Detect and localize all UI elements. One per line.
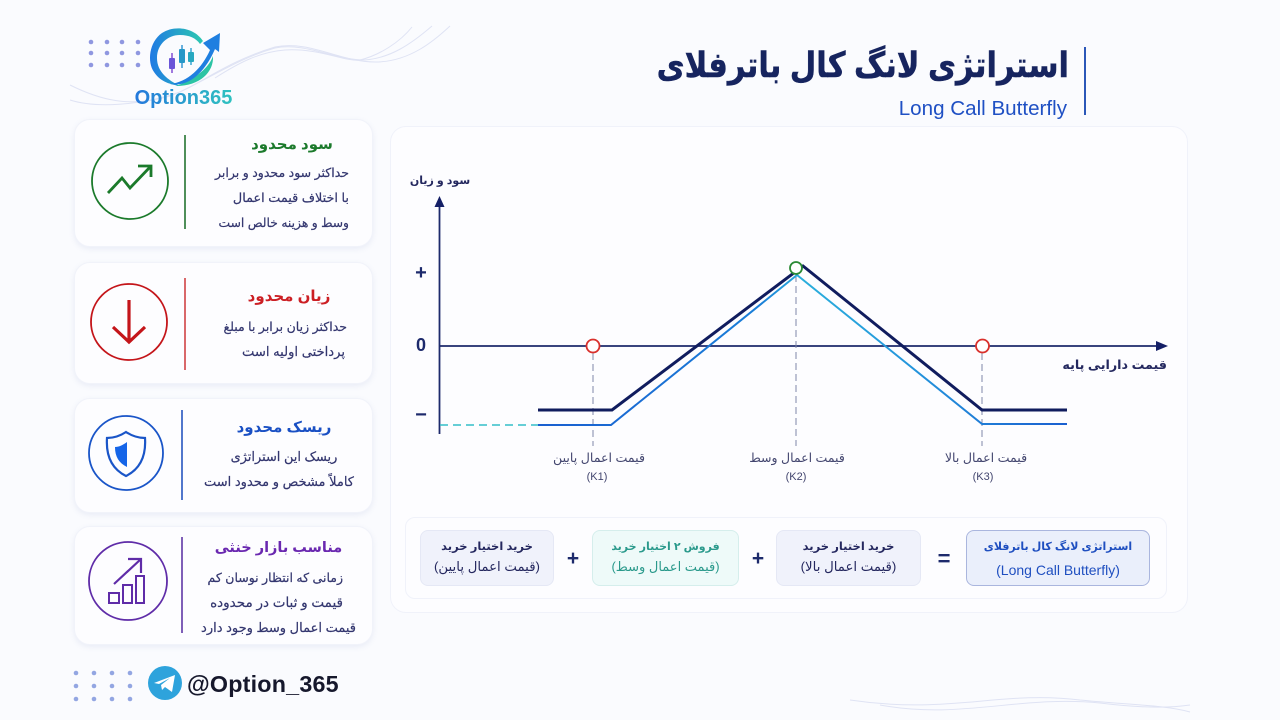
icon: telegram — [148, 666, 182, 700]
heading: limited profit: سود محدود — [251, 136, 333, 153]
icon: bar chart with arrow — [88, 541, 168, 621]
axis tick plus: + — [415, 262, 427, 284]
equals sign: = — [938, 546, 950, 571]
text: neutral market line 3: قیمت اعمال وسط وجود دارد — [201, 620, 356, 635]
panel: payoff chart — [390, 126, 1188, 613]
panel: formula — [405, 517, 1167, 599]
strike K3 symbol: (K3) — [973, 471, 993, 483]
text: limited loss line 2: پرداختی اولیه است — [242, 344, 345, 359]
point K3 — [976, 340, 989, 352]
text: limited risk: ریسک این استراتژی — [231, 449, 337, 464]
title: استراتژی لانگ کال باترفلای — [657, 46, 1069, 85]
plus sign: + — [567, 547, 579, 570]
text: neutral market: زمانی که انتظار نوسان کم — [208, 571, 343, 585]
text: limited profit line 2: با اختلاف قیمت اعمال — [233, 190, 349, 205]
formula box: buy low strike — [420, 530, 554, 586]
payoff line dark — [538, 266, 1067, 410]
strike K1 symbol: (K1) — [587, 471, 607, 483]
text: limited profit: حداکثر سود محدود و برابر — [215, 166, 349, 180]
logo: Option365: Option365 — [135, 87, 232, 109]
payoff line light — [538, 275, 1067, 425]
formula text: buy low strike: خرید اختیار خرید — [441, 541, 533, 553]
strike label K2: قیمت اعمال وسط — [749, 451, 845, 465]
icon: rising trend — [91, 142, 169, 220]
panel: limited loss — [74, 262, 373, 384]
telegram handle: @Option_365 — [187, 671, 339, 697]
subtitle: Long Call Butterfly — [899, 97, 1067, 120]
strike K2 symbol: (K2) — [786, 471, 806, 483]
panel: limited profit — [74, 119, 373, 247]
axis tick minus: − — [415, 404, 427, 426]
heading: limited risk: ریسک محدود — [237, 419, 331, 436]
formula text: english: (Long Call Butterfly) — [996, 562, 1120, 578]
formula text: middle strike: (قیمت اعمال وسط) — [611, 559, 720, 574]
divider — [184, 278, 186, 370]
teal dashed max-loss guide — [440, 424, 538, 426]
panel: neutral market — [74, 526, 373, 645]
decorative dot grid bottom — [74, 670, 132, 702]
text: limited loss: حداکثر زیان برابر با مبلغ — [223, 320, 347, 334]
formula text: buy high: خرید اختیار خرید — [803, 541, 894, 553]
text: limited profit line 3: وسط و هزینه خالص است — [219, 216, 349, 230]
formula box: strategy — [966, 530, 1150, 586]
panel: limited risk — [74, 398, 373, 513]
text: limited risk line 2: کاملاً مشخص و محدود است — [204, 474, 354, 489]
formula text: low strike: (قیمت اعمال پایین) — [434, 559, 540, 574]
heading: limited loss: زیان محدود — [248, 288, 330, 305]
strike label K3: قیمت اعمال بالا — [945, 451, 1027, 465]
axis tick zero: 0 — [416, 335, 426, 355]
divider — [181, 537, 183, 633]
axis label: profit and loss: سود و زیان — [410, 175, 470, 187]
heading: neutral market: مناسب بازار خنثی — [215, 540, 342, 556]
point K2 — [790, 262, 802, 274]
formula text: high strike: (قیمت اعمال بالا) — [801, 559, 896, 574]
point K1 — [586, 340, 600, 352]
plus sign: + — [752, 547, 764, 570]
decorative dot grid top — [88, 40, 140, 68]
strike label K1: قیمت اعمال پایین — [553, 451, 645, 465]
formula box: sell two middle — [592, 530, 739, 586]
strike guides — [593, 275, 982, 446]
axes — [434, 196, 1168, 434]
icon: shield — [88, 415, 164, 491]
divider — [181, 410, 183, 500]
text: neutral market line 2: قیمت و ثبات در محدوده — [210, 595, 343, 610]
title accent bar — [1084, 47, 1086, 115]
logo: Option365 — [135, 28, 232, 109]
formula box: buy high strike — [776, 530, 921, 586]
formula text: sell two: فروش ۲ اختیار خرید — [611, 541, 720, 553]
axis label: underlying price: قیمت دارایی پایه — [1062, 358, 1167, 372]
formula text: strategy: استراتژی لانگ کال باترفلای — [984, 541, 1132, 553]
divider — [184, 135, 186, 229]
icon: down arrow — [90, 283, 168, 361]
payoff chart — [434, 196, 1168, 446]
